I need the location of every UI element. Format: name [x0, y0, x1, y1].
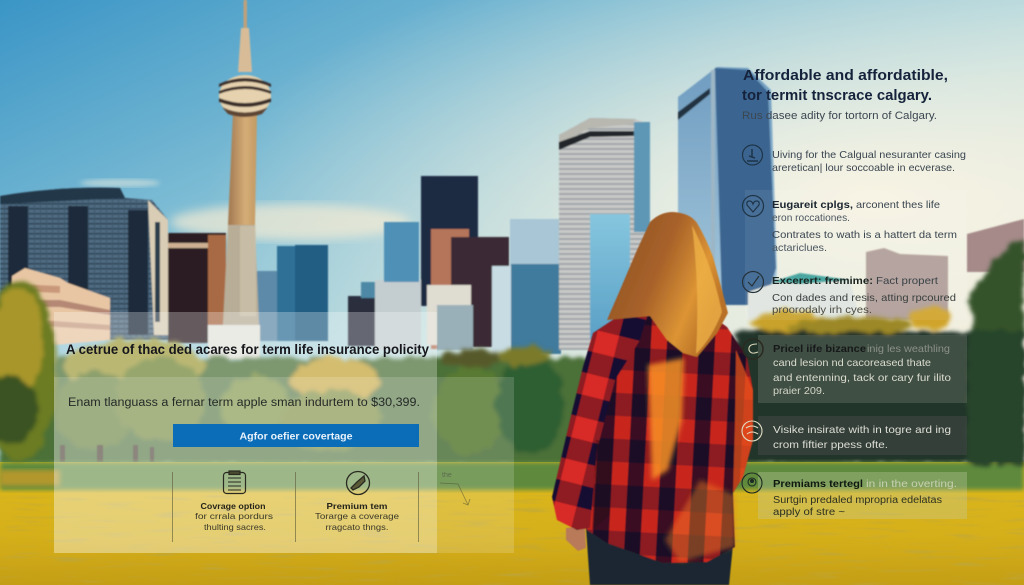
column: premium term: Premium tem	[326, 501, 388, 511]
column: premium term: Torarge a coverage	[315, 511, 399, 521]
city skyline	[0, 0, 1024, 360]
note with arrow: the	[442, 472, 452, 479]
item 6: in in the overting.	[866, 478, 957, 490]
item 1	[742, 145, 966, 174]
icon: check	[742, 272, 764, 292]
panel: right overlay backgrounds	[745, 190, 967, 519]
far tree line	[0, 306, 1024, 466]
building: striped tower	[559, 118, 650, 350]
item 4: and entenning, tack or cary fur ilito	[773, 372, 951, 384]
landmark tower	[208, 0, 271, 360]
column: premium term	[315, 472, 399, 532]
column: coverage option: thulting sacres.	[204, 522, 266, 532]
subheading: Rus dasee adity for tortorn of Calgary.	[742, 110, 937, 122]
tree trunks	[60, 445, 154, 473]
item 5: crom fiftier ppess ofte.	[773, 439, 888, 451]
shirt left sleeve	[552, 306, 650, 530]
item 4: inig les weathling	[867, 343, 950, 355]
icon: hand in circle	[346, 472, 370, 494]
item 2	[742, 196, 957, 254]
button: Agfor oefier covertage	[240, 430, 353, 442]
column: coverage option: for crrala pordurs	[195, 511, 273, 521]
shirt lower right sunlight	[665, 480, 735, 562]
item 5	[742, 421, 951, 451]
item 4	[743, 339, 951, 397]
item 6: apply of stre ~	[773, 507, 845, 518]
note with arrow	[440, 472, 470, 505]
shirt body	[587, 300, 753, 563]
item 6	[742, 473, 957, 518]
building: peach low block	[12, 268, 110, 345]
tree: right foreground	[968, 240, 1024, 465]
item 4: cand lesion nd cacoreased thate	[773, 357, 931, 369]
column: premium term: rragcato thngs.	[326, 522, 388, 532]
item 5: Visike insirate with in togre ard ing	[773, 424, 951, 436]
item 2: arconent thes life	[856, 199, 940, 211]
item 1: Uiving for the Calgual nesuranter casing	[772, 149, 966, 161]
person	[552, 212, 753, 585]
item 3	[742, 272, 956, 316]
jeans	[586, 528, 733, 585]
icon: heart	[742, 196, 764, 216]
shirt sunlight patch	[648, 358, 684, 480]
column dividers	[172, 472, 418, 542]
icon: hand circle	[742, 421, 762, 441]
button	[173, 424, 419, 447]
icon: target	[742, 473, 762, 493]
icon: swirl	[743, 339, 763, 359]
panel: left overlay	[54, 312, 514, 553]
shirt fold shadow	[592, 440, 612, 530]
ground: lawn	[0, 462, 1024, 585]
heading: Affordable and affordatible,	[743, 67, 948, 84]
building: left office block	[0, 188, 168, 340]
heading	[742, 67, 948, 104]
item 2: eron roccationes.	[772, 212, 850, 224]
building: blue mid towers	[257, 222, 421, 350]
item 3: Fact propert	[876, 275, 938, 287]
heading: tor termit tnscrace calgary.	[742, 87, 932, 104]
tree: left foreground	[0, 278, 56, 462]
building: light blue cluster	[492, 219, 561, 354]
item 4: praier 209.	[773, 385, 825, 397]
item 2: actariclues.	[772, 242, 827, 254]
item 3: proorodaly irh cyes.	[772, 304, 872, 316]
item 2: Eugareit cplgs,	[772, 199, 853, 211]
column: coverage option: Covrage option	[200, 501, 266, 511]
icon: clipboard	[224, 471, 246, 494]
item 6: Surtgin predaled mpropria edelatas	[773, 495, 942, 506]
shirt right sleeve	[733, 350, 753, 493]
building: brown block	[168, 233, 226, 343]
item 1: areretican| lour soccoable in ecverase.	[772, 162, 955, 174]
body text: Enam tlanguass a fernar term apple sman indurtem to $30,399.	[68, 397, 420, 409]
hair highlight	[692, 225, 722, 354]
panel: right text	[742, 67, 966, 518]
icon: figure	[742, 145, 762, 165]
building: dark tower	[421, 176, 478, 306]
building: right background blocks	[748, 219, 1024, 320]
hand	[566, 526, 586, 551]
foreground trees	[0, 240, 1024, 465]
item 6: Premiams tertegl	[773, 478, 863, 490]
item 2: Contrates to wath is a hattert da term	[772, 229, 957, 241]
item 3: Con dades and resis, atting rpcoured	[772, 292, 956, 304]
item 3: Excerert: fremime:	[772, 275, 873, 287]
heading: A cetrue of thac ded acares for term life insurance policity	[66, 341, 429, 357]
building: tall glass tower	[678, 67, 777, 305]
hair	[607, 212, 728, 357]
building: brick and dark tower	[427, 229, 509, 350]
column: coverage option	[195, 471, 273, 532]
item 4: Pricel iife bizance	[773, 343, 866, 355]
